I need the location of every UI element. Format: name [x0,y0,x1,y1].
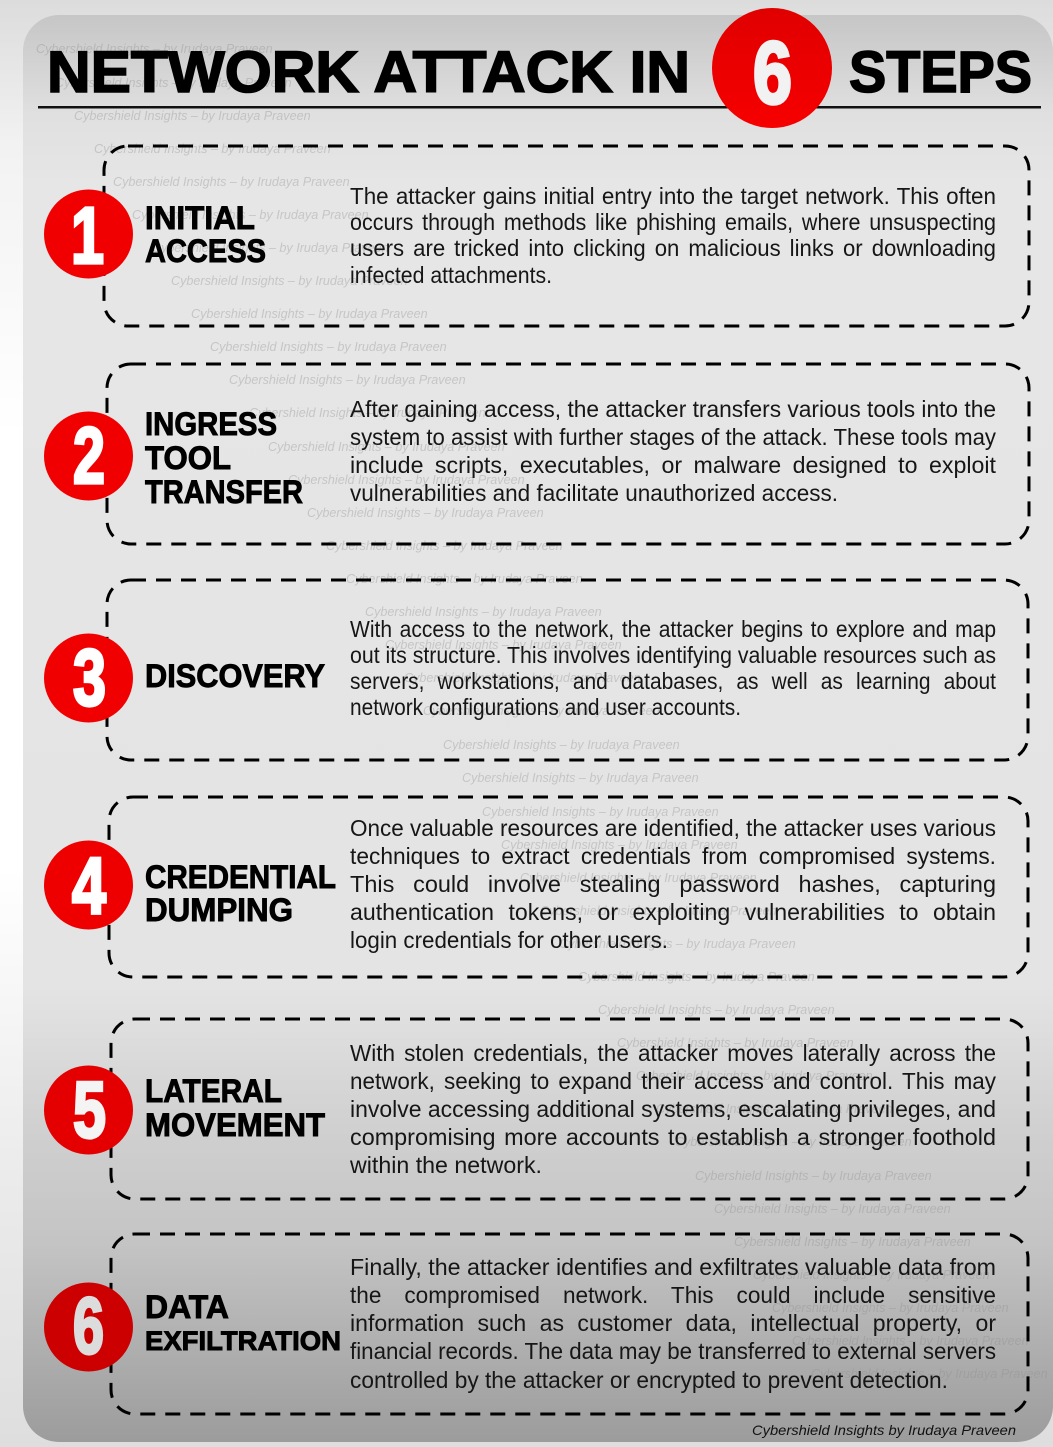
repeating watermark: Cybershield Insights – by Irudaya Praveen [540,904,777,918]
description: network, seeking to expand their access and control. This may [350,1068,996,1094]
title number badge [712,8,832,128]
repeating watermark: Cybershield Insights – by Irudaya Praveen [734,1235,971,1249]
description: login credentials for other users. [350,927,668,953]
repeating watermark: Cybershield Insights – by Irudaya Praveen [636,1069,873,1083]
description [350,815,996,953]
title rule [38,106,1041,108]
repeating watermark: Cybershield Insights – by Irudaya Praveen [36,42,273,56]
description [350,1254,996,1393]
heading: TOOL [145,440,231,476]
panel: step 4 credential dumping [44,797,1028,977]
description [349,1040,996,1178]
number badge 5: 5 [73,1065,106,1154]
description: Finally, the attacker identifies and exfiltrates valuable data from [350,1254,996,1280]
repeating watermark: Cybershield Insights – by Irudaya Praveen [326,539,563,553]
description: compromising more accounts to establish a stronger foothold [350,1124,996,1150]
description: occurs through methods like phishing emails, where unsuspecting [350,209,996,235]
number badge 4: 4 [72,841,106,930]
repeating watermark: Cybershield Insights – by Irudaya Praveen [74,109,311,123]
number badge 3 [44,633,133,722]
description: controlled by the attacker or encrypted to prevent detection. [350,1367,948,1393]
repeating watermark: Cybershield Insights – by Irudaya Praveen [598,1003,835,1017]
number badge 3: 3 [73,633,106,722]
repeating watermark: Cybershield Insights – by Irudaya Praveen [811,1367,1048,1381]
description: authentication tokens, or exploiting vulnerabilities to obtain [350,899,996,925]
description: Once valuable resources are identified, the attacker uses various [350,815,996,841]
panel: step 3 discovery [44,580,1028,760]
description: vulnerabilities and facilitate unauthorized access. [350,480,838,506]
repeating watermark: Cybershield Insights – by Irudaya Praveen [423,704,660,718]
repeating watermark: Cybershield Insights – by Irudaya Praveen [249,406,486,420]
dashed frame [104,146,1029,326]
dashed frame [107,364,1029,544]
description: This could involve stealing password hashes, capturing [350,871,996,897]
panel: step 6 data exfiltration [44,1234,1028,1414]
repeating watermark: Cybershield Insights – by Irudaya Praveen [482,805,719,819]
repeating watermark: Cybershield Insights – by Irudaya Praveen [501,838,738,852]
number badge 5 [44,1065,133,1154]
repeating watermark: Cybershield Insights – by Irudaya Praveen [753,1268,990,1282]
footer credit: Cybershield Insights by Irudaya Praveen [752,1422,1016,1438]
description [350,183,996,288]
description: network configurations and user accounts. [350,694,741,720]
repeating watermark: Cybershield Insights – by Irudaya Praveen [656,1102,893,1116]
repeating watermark: Cybershield Insights – by Irudaya Praveen [152,241,389,255]
number badge 1 [44,190,133,280]
repeating watermark: Cybershield Insights – by Irudaya Praveen [210,340,447,354]
repeating watermark: Cybershield Insights – by Irudaya Praveen [55,76,292,90]
description: With access to the network, the attacker begins to explore and map [350,616,996,642]
description [350,616,997,720]
description: infected attachments. [350,262,552,288]
title text right: STEPS [849,40,1032,105]
dashed frame [111,1234,1028,1414]
number badge 2: 2 [73,411,105,500]
repeating watermark: Cybershield Insights – by Irudaya Praveen [268,440,505,454]
heading [145,1289,341,1356]
heading [145,859,336,928]
description: within the network. [349,1152,542,1178]
repeating watermark: Cybershield Insights – by Irudaya Praveen [617,1036,854,1050]
heading: INITIAL [145,200,255,236]
repeating watermark: Cybershield Insights – by Irudaya Praveen [365,605,602,619]
repeating watermark: Cybershield Insights – by Irudaya Praveen [404,671,641,685]
repeating watermark: Cybershield Insights – by Irudaya Praveen [443,738,680,752]
repeating watermark: Cybershield Insights – by Irudaya Praveen [113,175,350,189]
repeating watermark: Cybershield Insights – by Irudaya Praveen [714,1202,951,1216]
title number badge: 6 [753,23,792,122]
description: techniques to extract credentials from compromised systems. [350,843,996,869]
description: financial records. The data may be transferred to external servers [350,1338,996,1364]
repeating watermark: Cybershield Insights – by Irudaya Praveen [695,1169,932,1183]
heading: DUMPING [145,892,293,928]
number badge 4 [44,840,133,930]
description: With stolen credentials, the attacker moves laterally across the [350,1040,996,1066]
heading: DISCOVERY [145,658,325,694]
panel: step 2 ingress tool transfer [44,364,1029,544]
description: After gaining access, the attacker transfers various tools into the [350,396,996,422]
description: include scripts, executables, or malware designed to exploit [350,452,997,478]
description: system to assist with further stages of the attack. These tools may [350,424,996,450]
repeating watermark: Cybershield Insights – by Irudaya Praveen [307,506,544,520]
repeating watermark: Cybershield Insights – by Irudaya Praveen [772,1301,1009,1315]
number badge 6 [44,1281,133,1372]
description: servers, workstations, and databases, as well as learning about [350,668,997,694]
heading: MOVEMENT [145,1107,325,1143]
description: involve accessing additional systems, escalating privileges, and [350,1096,996,1122]
heading [145,1073,325,1143]
panel: step 1 initial access [44,146,1029,326]
repeating watermark: Cybershield Insights – by Irudaya Praveen [675,1135,912,1149]
heading: EXFILTRATION [145,1326,341,1356]
description [350,396,997,506]
title [38,8,1041,128]
repeating watermark: Cybershield Insights – by Irudaya Praveen [559,937,796,951]
repeating watermark: Cybershield Insights – by Irudaya Praveen [792,1334,1029,1348]
heading: INGRESS [145,406,277,442]
repeating watermark: Cybershield Insights – by Irudaya Praveen [288,473,525,487]
description: information such as customer data, intellectual property, or [350,1310,996,1336]
repeating watermark: Cybershield Insights – by Irudaya Praveen [171,274,408,288]
number badge 1: 1 [71,191,104,280]
heading: CREDENTIAL [145,859,336,895]
panel: step 5 lateral movement [44,1019,1028,1199]
description: out its structure. This involves identifying valuable resources such as [350,642,996,668]
dashed frame [107,580,1028,760]
repeating watermark: Cybershield Insights – by Irudaya Praveen [132,208,369,222]
heading: DATA [145,1289,229,1325]
heading [145,200,266,269]
repeating watermark: Cybershield Insights – by Irudaya Praveen [191,307,428,321]
description: The attacker gains initial entry into the target network. This often [350,183,996,209]
heading [145,406,303,510]
description: users are tricked into clicking on malicious links or downloading [350,235,996,261]
dashed frame [111,1019,1028,1199]
heading: ACCESS [145,233,266,269]
number badge 2 [44,411,133,500]
number badge 6: 6 [73,1281,104,1370]
repeating watermark: Cybershield Insights – by Irudaya Praveen [229,373,466,387]
repeating watermark: Cybershield Insights – by Irudaya Praveen [520,871,757,885]
repeating watermark: Cybershield Insights – by Irudaya Praveen [385,638,622,652]
dashed frame [109,797,1028,977]
title text left: NETWORK ATTACK IN [47,40,690,105]
repeating watermark: Cybershield Insights – by Irudaya Praveen [578,970,815,984]
description: the compromised network. This could include sensitive [350,1282,996,1308]
repeating watermark: Cybershield Insights – by Irudaya Praveen [346,572,583,586]
repeating watermark: Cybershield Insights – by Irudaya Praveen [462,771,699,785]
heading: LATERAL [145,1073,282,1109]
heading: TRANSFER [145,474,303,510]
repeating watermark: Cybershield Insights – by Irudaya Praveen [94,142,331,156]
